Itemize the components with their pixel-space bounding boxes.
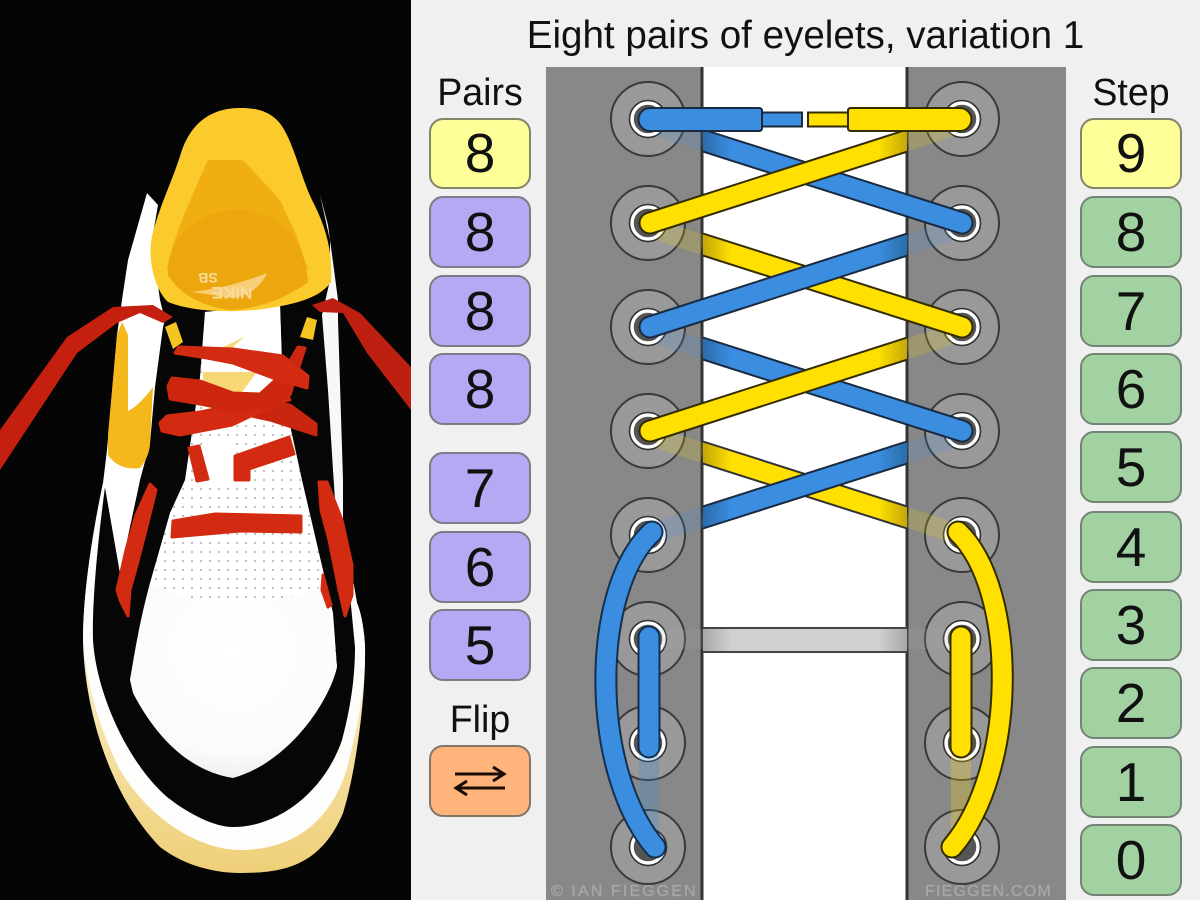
yellow lace end with aglet: [808, 108, 972, 131]
button: pairs 6: 6: [465, 536, 495, 598]
button: step 1: [1080, 746, 1182, 818]
tongue upper white: [203, 305, 282, 410]
button: step 4: 4: [1116, 516, 1146, 578]
heading: step: Step: [1092, 71, 1170, 113]
panel: step column: [1080, 71, 1182, 896]
button: pairs 8: [429, 353, 531, 425]
button: step 0: 0: [1116, 828, 1146, 890]
button: pairs 8 selected: 8: [465, 122, 495, 184]
icon: flip arrows: [453, 766, 507, 796]
yellow inner stitch: [950, 637, 972, 747]
button: pairs 8: 8: [465, 200, 495, 262]
toe box: [130, 583, 337, 778]
insole with logo: [168, 210, 308, 310]
button: step 1: 1: [1116, 750, 1146, 812]
button: pairs 7: [429, 452, 531, 524]
lace crossings: [117, 347, 352, 616]
yellow swoosh: [108, 322, 153, 468]
shoe collar: [151, 108, 331, 311]
row 1 crossing laces: [648, 123, 962, 223]
heading: pairs: Pairs: [437, 71, 523, 113]
tongue and mesh: [130, 305, 337, 680]
button: pairs 8: [429, 275, 531, 347]
button: pairs 7: 7: [465, 456, 495, 518]
yellow outer arc: [952, 532, 1002, 847]
opening edges: [702, 67, 907, 900]
watermark left: © IAN FIEGGEN: [551, 883, 698, 900]
shoe right white strip: [320, 195, 343, 523]
button: step 0: [1080, 824, 1182, 896]
shoe opening: [703, 67, 907, 900]
right eyelet flap: [907, 67, 1066, 900]
shoe white band: [83, 480, 365, 850]
shoe inner heel: [167, 160, 308, 270]
button: step 2: 2: [1116, 672, 1146, 734]
tongue logo: [203, 336, 257, 392]
button: flip: [429, 745, 531, 817]
button: pairs 5: 5: [465, 614, 495, 676]
button: pairs 6: [429, 531, 531, 603]
row 3 crossing laces: [648, 331, 962, 431]
button: step 5: 5: [1116, 436, 1146, 498]
shoe sole: [83, 480, 365, 873]
button: pairs 8: 8: [465, 280, 495, 342]
panel: pairs column: [429, 71, 531, 817]
left eyelet flap: [546, 67, 703, 900]
button: step 6: 6: [1116, 358, 1146, 420]
button: step 8: [1080, 196, 1182, 268]
button: step 3: [1080, 589, 1182, 661]
button: pairs 8: 8: [465, 358, 495, 420]
watermark right: FIEGGEN.COM: [925, 883, 1052, 900]
blue lace end with aglet: [638, 108, 802, 131]
button: pairs 8 selected: [429, 118, 531, 189]
button: step 3: 3: [1116, 594, 1146, 656]
button: step 7: 7: [1116, 280, 1146, 342]
insole with logo: SB: [198, 270, 218, 286]
button: step 8: 8: [1116, 200, 1146, 262]
row 4 crossing laces: [703, 440, 907, 530]
shoe left white quarter panel: [103, 193, 165, 573]
right loose lace: [312, 298, 411, 410]
row 2 crossing laces: [648, 227, 962, 327]
tongue center stripe: [207, 437, 235, 482]
button: pairs 5: [429, 609, 531, 681]
button: step 4: [1080, 511, 1182, 583]
button: step 9 selected: [1080, 118, 1182, 189]
blue inner stitch: [638, 637, 660, 747]
hidden lace shadows under flaps: [649, 127, 961, 830]
left loose lace: [0, 305, 173, 470]
title: Eight pairs of eyelets, variation 1: [527, 14, 1084, 57]
button: step 9 selected: 9: [1116, 122, 1146, 184]
blue outer arc: [606, 532, 655, 847]
panel: shoe photo illustration: [0, 0, 411, 900]
button: step 6: [1080, 353, 1182, 425]
heading: flip: Flip: [450, 698, 510, 740]
shoe black band: [93, 305, 355, 827]
insole with logo: NIKE: [212, 283, 252, 302]
button: step 5: [1080, 431, 1182, 503]
lace aglets: [165, 317, 317, 349]
button: pairs 8: [429, 196, 531, 268]
eyelets: [611, 82, 999, 884]
button: step 2: [1080, 667, 1182, 739]
panel: lacing diagram: [546, 67, 1066, 900]
gray hidden lace: [703, 627, 907, 653]
button: step 7: [1080, 275, 1182, 347]
